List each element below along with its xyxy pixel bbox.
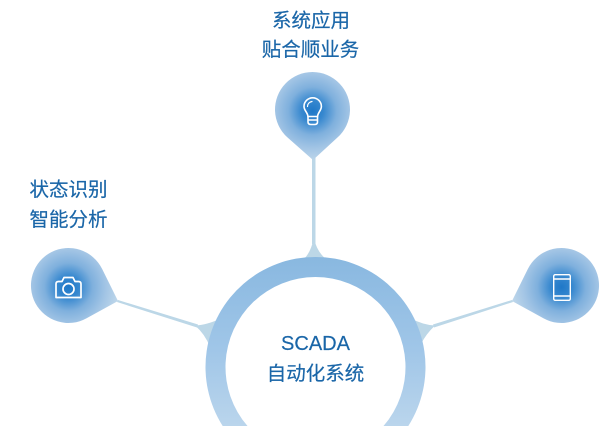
heading: top pin: 系统应用 [272, 10, 350, 32]
icon: tablet [554, 275, 570, 300]
heading: top pin: 贴合顺业务 [262, 39, 359, 61]
icon: lightbulb [304, 98, 321, 124]
heading: left pin: 智能分析 [29, 209, 108, 231]
central label: 自动化系统 [267, 363, 364, 385]
pin: right with tablet icon [512, 248, 599, 323]
heading: left pin [29, 179, 108, 231]
pin: left with camera icon [31, 248, 118, 323]
central ring [205, 257, 426, 426]
heading: top pin [262, 10, 359, 61]
connector: left pin to ring [117, 300, 222, 347]
central label [267, 333, 364, 385]
icon: camera [56, 278, 81, 298]
central label: SCADA [281, 333, 351, 355]
heading: left pin: 状态识别 [29, 179, 108, 201]
pin: top with lightbulb icon [275, 72, 350, 160]
connector: top pin to ring [304, 156, 326, 259]
connector: right pin to ring [410, 300, 513, 344]
